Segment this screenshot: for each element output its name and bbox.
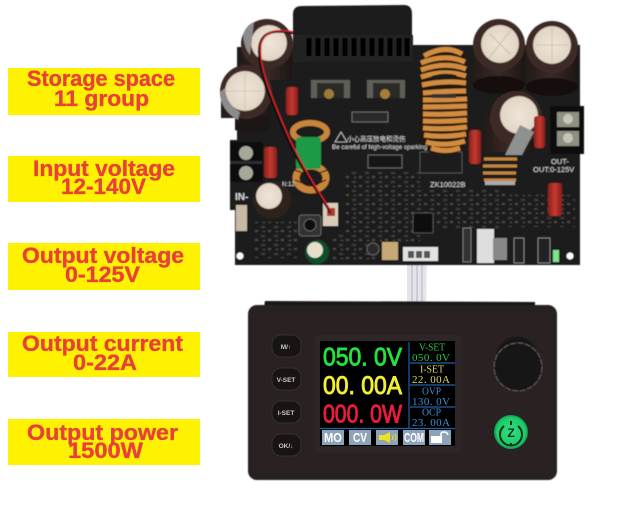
silkscreen text: Be careful of high-voltage sparking <box>332 144 428 151</box>
label: output power: Output power <box>27 420 178 445</box>
silkscreen text: ZK10022B <box>430 180 465 189</box>
label: input voltage: 12-140V <box>61 174 146 199</box>
capacitor top right 2 <box>526 21 578 96</box>
pcb base <box>230 45 580 265</box>
power inductors <box>299 215 379 255</box>
small coil right <box>483 159 517 185</box>
divider lines <box>320 342 455 428</box>
status tabs <box>322 430 451 445</box>
circuit board <box>220 5 584 265</box>
capacitor lower left <box>253 181 291 219</box>
screen <box>320 341 455 446</box>
label: output voltage <box>8 243 200 290</box>
setting values <box>412 342 450 429</box>
buttons: M/↑ <box>281 344 291 351</box>
status led <box>553 250 559 262</box>
label: output current: 0-22A <box>73 350 137 375</box>
label: output voltage: 0-125V <box>65 262 140 287</box>
large toroid inductor <box>420 48 467 154</box>
rotary knob <box>494 337 542 391</box>
status tabs: CV <box>353 430 367 445</box>
small green capacitor <box>305 240 329 264</box>
capacitor top right 1 <box>473 19 525 94</box>
silkscreen text: 小心高压放电和烫伤 <box>347 134 406 143</box>
buttons <box>272 335 301 456</box>
label: storage space: 11 group <box>54 86 149 111</box>
left terminal block <box>230 142 263 182</box>
display module <box>248 301 557 480</box>
setting values: 130. 0V <box>412 396 450 408</box>
setting values: I-SET <box>420 364 444 376</box>
silkscreen text: IN- <box>235 192 248 203</box>
label: output power <box>8 419 200 465</box>
label: storage space: Storage space <box>27 66 175 91</box>
label: output current <box>8 331 200 377</box>
capacitor left <box>220 65 272 133</box>
label: output power: 1500W <box>68 438 143 463</box>
smd component areas <box>255 112 575 262</box>
label: output current: Output current <box>22 331 184 356</box>
silkscreen text: N:12 <box>282 182 295 188</box>
capacitor top left <box>241 19 293 80</box>
ribbon cable <box>407 258 427 306</box>
small green inductor <box>293 123 327 190</box>
label: output voltage: Output voltage <box>22 243 184 268</box>
buttons: OK/↓ <box>279 443 293 450</box>
setting values: 22. 00A <box>412 374 450 386</box>
module body <box>248 301 557 480</box>
main readouts <box>323 344 402 428</box>
main readouts: 00. 00A <box>323 372 402 400</box>
silkscreen text <box>235 132 574 203</box>
main readouts: 050. 0V <box>323 344 402 372</box>
setting values: OVP <box>422 386 441 398</box>
red film capacitors <box>264 87 562 216</box>
setting values: 050. 0V <box>412 352 450 364</box>
red wire <box>259 31 331 213</box>
label: input voltage: Input voltage <box>33 156 175 181</box>
heat sink <box>293 5 413 62</box>
green power button <box>494 415 528 449</box>
main readouts: 000. 0W <box>323 400 402 428</box>
setting values: OCP <box>422 408 441 418</box>
mosfets <box>311 80 405 99</box>
connectors <box>236 203 550 263</box>
buttons: V-SET <box>277 377 295 384</box>
label: storage space <box>8 66 200 115</box>
label: input voltage <box>8 156 200 202</box>
right terminal block <box>550 106 584 154</box>
green power button: Z <box>507 426 515 440</box>
mounting holes <box>236 252 574 260</box>
silkscreen text: OUT- <box>551 157 569 166</box>
status tabs: COM <box>404 430 424 445</box>
setting values: V-SET <box>419 342 445 354</box>
capacitor centre right <box>484 91 542 155</box>
silkscreen text: OUT:0-125V <box>533 165 574 174</box>
buttons: I-SET <box>278 410 294 417</box>
status tabs: MO <box>324 430 342 445</box>
setting values: 23. 00A <box>412 417 450 429</box>
